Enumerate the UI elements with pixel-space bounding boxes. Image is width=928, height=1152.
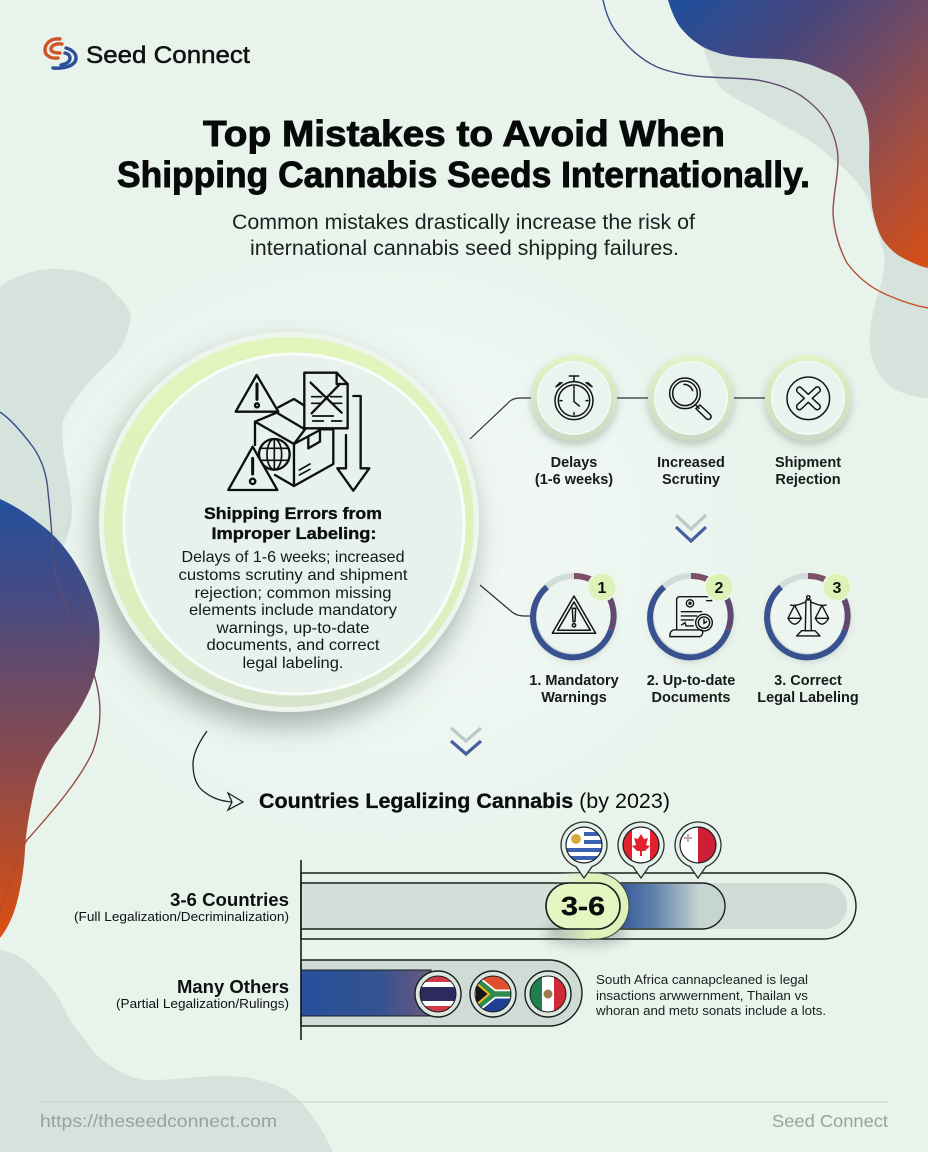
- label: Scrutiny: [662, 472, 720, 488]
- pin: Malta: [675, 822, 721, 878]
- outer ring: [99, 332, 479, 712]
- element 1: mandatory warnings: [529, 573, 619, 706]
- pin: Canada: [618, 822, 664, 878]
- logo mark: [45, 39, 76, 68]
- badge 2: 2: [715, 580, 724, 597]
- chart note: [595, 972, 826, 1018]
- bar: 3-6 countries track: [301, 873, 856, 939]
- chart heading: Countries Legalizing Cannabis (by 2023): [259, 790, 670, 813]
- label: Documents: [652, 690, 730, 706]
- value pill: [546, 883, 620, 929]
- panel body text: legal labeling.: [242, 655, 344, 672]
- title: [117, 113, 810, 195]
- bar: 3-6 countries fill: [301, 883, 725, 929]
- footer: [40, 1102, 888, 1131]
- panel body text: customs scrutiny and shipment: [178, 567, 408, 584]
- connector: main circle to effects: [470, 398, 533, 439]
- badge 1: 1: [598, 580, 607, 597]
- label: [647, 673, 735, 706]
- element 3: correct legal labeling: [757, 573, 859, 706]
- flag: South Africa: [470, 971, 516, 1017]
- label: [757, 673, 859, 706]
- label: Delays: [551, 455, 597, 471]
- badge 3: 3: [833, 580, 842, 597]
- label: Shipment: [775, 455, 841, 471]
- bar: many others track: [301, 960, 582, 1026]
- effect: increased scrutiny: [648, 355, 734, 488]
- panel body text: elements include mandatory: [189, 602, 397, 619]
- label: [775, 455, 841, 488]
- decorative blob: left: [0, 499, 100, 938]
- label: (1-6 weeks): [535, 472, 613, 488]
- label: 1. Mandatory: [529, 673, 619, 689]
- chart note: insactions arwwernment, Thailan vs: [596, 988, 808, 1003]
- icon: document with seal: [670, 597, 712, 637]
- panel body text: documents, and correct: [206, 637, 380, 654]
- panel body text: [178, 549, 408, 672]
- axis: [300, 860, 302, 1040]
- decorative blob: top right: [668, 0, 928, 268]
- flag: Thailand: [415, 971, 461, 1017]
- inner disc: [122, 352, 466, 696]
- subtitle: [232, 210, 695, 260]
- title: Top Mistakes to Avoid When: [203, 113, 725, 154]
- label: [535, 455, 613, 488]
- row label: many others: [116, 977, 289, 1011]
- label: 2. Up-to-date: [647, 673, 735, 689]
- icon: shipping box with warnings: [228, 373, 369, 491]
- bar: many others fill: [301, 970, 431, 1016]
- panel heading: Shipping Errors from: [204, 504, 382, 523]
- subtitle: Common mistakes drastically increase the risk of: [232, 210, 695, 234]
- subtitle: international cannabis seed shipping failures.: [250, 236, 679, 260]
- decorative curve: left: [0, 412, 100, 912]
- icon: stopwatch: [555, 376, 593, 420]
- panel: shipping errors circle: [99, 332, 479, 712]
- pin: Uruguay: [561, 822, 607, 878]
- effect: delays: [531, 355, 617, 488]
- connector lines between effect circles: [617, 397, 766, 399]
- label: 3. Correct: [774, 673, 842, 689]
- label: Warnings: [541, 690, 607, 706]
- footer brand: Seed Connect: [772, 1111, 888, 1131]
- icon: scales of justice: [788, 596, 829, 636]
- label: Increased: [657, 455, 725, 471]
- label: Rejection: [775, 472, 841, 488]
- row label: many others: (Partial Legalization/Rulings): [116, 996, 289, 1011]
- icon: magnifier: [670, 378, 711, 419]
- value pill: 3-6: [561, 891, 605, 921]
- icon: cross in circle: [787, 377, 830, 420]
- icon: chevrons between rows: [676, 515, 706, 541]
- chart note: South Africa cannapcleaned is legal: [596, 972, 808, 987]
- row label: 3-6 countries: (Full Legalization/Decriminalization): [74, 909, 289, 924]
- element 2: up-to-date documents: [647, 573, 735, 706]
- chart note: whoran and metʊ sonats include a lots.: [595, 1003, 826, 1018]
- value pill halo: [556, 873, 629, 939]
- effect: shipment rejection: [765, 355, 851, 488]
- pill shadow: [544, 921, 628, 945]
- icon: warning triangle: [552, 596, 596, 633]
- panel heading: [204, 504, 382, 543]
- decorative curve: top right: [603, 0, 928, 308]
- panel heading: Improper Labeling:: [212, 524, 376, 543]
- label: [529, 673, 619, 706]
- row label: 3-6 countries: [74, 890, 289, 924]
- arrow: curved to chart heading: [193, 731, 243, 810]
- row label: many others: Many Others: [177, 977, 289, 997]
- brand name: Seed Connect: [86, 42, 250, 69]
- flag: Mexico: [525, 971, 571, 1017]
- panel body text: warnings, up-to-date: [215, 620, 370, 637]
- panel body text: rejection; common missing: [194, 585, 392, 602]
- label: [657, 455, 725, 488]
- row label: 3-6 countries: 3-6 Countries: [170, 890, 289, 910]
- icon: chevrons to chart section: [451, 728, 481, 754]
- chart: legalization bars: [301, 822, 856, 1040]
- title: Shipping Cannabis Seeds Internationally.: [117, 154, 810, 195]
- footer url: https://theseedconnect.com: [40, 1111, 277, 1131]
- logo: [45, 39, 250, 69]
- label: Legal Labeling: [757, 690, 859, 706]
- connector: main circle to missing elements: [480, 585, 533, 616]
- panel body text: Delays of 1-6 weeks; increased: [182, 549, 404, 566]
